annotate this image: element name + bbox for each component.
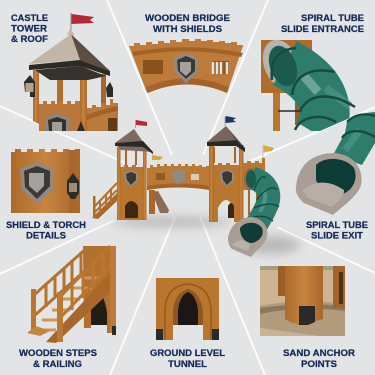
label: spiral tube slide exit: SPIRAL TUBE (306, 219, 368, 230)
left yellow flag (152, 155, 163, 160)
rear railing (34, 247, 88, 316)
label: castle tower and roof (11, 12, 48, 44)
roof (29, 29, 110, 80)
front railing (60, 246, 110, 318)
main post (285, 266, 323, 325)
label: shield and torch details: DETAILS (26, 230, 66, 240)
bridge (147, 164, 210, 190)
panel: wooden bridge with shields (129, 39, 243, 93)
bridge shield (174, 53, 198, 83)
front stringer (46, 273, 110, 343)
right tower (207, 126, 245, 222)
label: ground level tunnel: GROUND LEVEL (150, 347, 225, 358)
central slide mouth (228, 217, 267, 257)
label: wooden steps and railing: & RAILING (33, 358, 82, 369)
bridge body (129, 39, 243, 93)
right tower flag (225, 116, 236, 126)
left tower (115, 129, 155, 220)
right extension (243, 158, 265, 215)
tower posts and wall (33, 65, 118, 131)
treads (33, 278, 100, 330)
arch frame (156, 278, 219, 340)
central spiral slide (244, 168, 279, 230)
label: spiral tube slide entrance (281, 12, 364, 34)
label: wooden bridge with shields (145, 12, 230, 34)
panel: ground level tunnel (156, 278, 219, 340)
label: ground level tunnel (150, 347, 225, 369)
left stairs (92, 183, 117, 219)
panel: sand anchor points (260, 266, 345, 336)
tower section (83, 246, 116, 335)
torch (67, 173, 79, 199)
panel: castle tower and roof (24, 13, 118, 131)
lanterns (24, 75, 113, 131)
label: sand anchor points: POINTS (301, 358, 337, 369)
label: castle tower and roof: TOWER (11, 22, 47, 34)
shield (20, 162, 54, 204)
rear posts (278, 266, 345, 308)
panel: spiral tube slide exit (296, 112, 375, 215)
tube mouth (296, 153, 362, 215)
panel: wooden steps and railing (27, 246, 116, 343)
label: castle tower and roof: & ROOF (11, 33, 48, 44)
label: ground level tunnel: TUNNEL (168, 358, 207, 369)
label: spiral tube slide exit (306, 219, 368, 240)
wood panel and posts (261, 40, 312, 131)
label: wooden steps and railing: WOODEN STEPS (19, 347, 97, 358)
slide tube (264, 42, 355, 135)
label: spiral tube slide entrance: SLIDE ENTRANCE (281, 23, 364, 34)
right yellow flag (263, 145, 274, 158)
ground shadow (112, 217, 300, 254)
tube body (333, 112, 375, 165)
label: spiral tube slide entrance: SPIRAL TUBE (301, 12, 364, 23)
wood wall (11, 149, 80, 213)
brackets (156, 329, 219, 340)
label: wooden bridge with shields: WITH SHIELDS (153, 23, 222, 34)
label: sand anchor points: SAND ANCHOR (283, 347, 355, 358)
label: shield and torch details (6, 219, 86, 240)
left slide (152, 191, 169, 213)
label: shield and torch details: SHIELD & TORCH (6, 219, 86, 230)
label: sand anchor points (283, 347, 355, 369)
bridge window right (212, 61, 229, 74)
bridge window left (143, 60, 163, 74)
label: castle tower and roof: CASTLE (11, 12, 48, 23)
shield on tower wall (45, 114, 69, 131)
panel: spiral tube slide entrance (261, 40, 356, 131)
tube entrance ring (256, 35, 306, 93)
sand background (260, 266, 345, 336)
label: wooden steps and railing (19, 347, 97, 369)
label: wooden bridge with shields: WOODEN BRIDGE (145, 12, 230, 23)
label: spiral tube slide exit: SLIDE EXIT (311, 230, 363, 240)
panel: shield and torch details (11, 149, 80, 213)
left tower flag (136, 120, 147, 128)
tunnel opening (173, 289, 203, 325)
central playset (92, 116, 300, 257)
post (69, 150, 76, 213)
flag: red pennant (71, 13, 94, 31)
anchor bracket (299, 306, 315, 325)
